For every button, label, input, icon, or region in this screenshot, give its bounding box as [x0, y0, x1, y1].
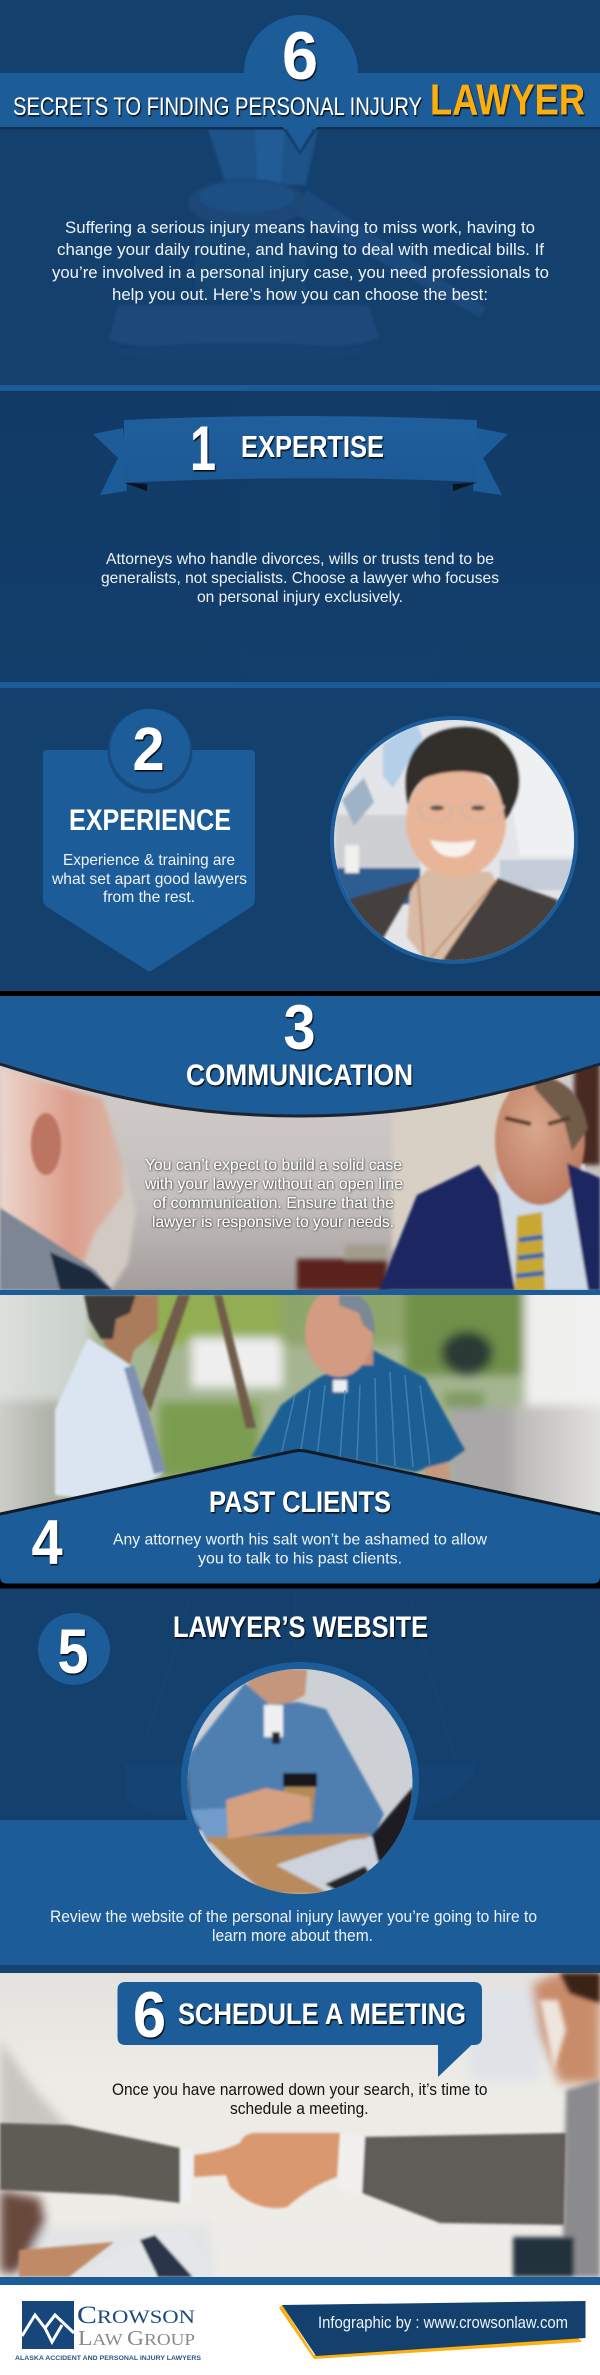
bubble number: 6 — [133, 1978, 166, 2051]
title banner — [0, 15, 600, 155]
text: expertise body: Attorneys who handle divorces, wills or trusts tend to be — [106, 551, 494, 568]
shirt stripes — [281, 1372, 430, 1467]
speech bubble heading — [118, 1978, 482, 2077]
body text: Review the website of the personal injury lawyer you’re going to hire to — [50, 1908, 537, 1926]
intro paragraph: you’re involved in a personal injury case, you need professionals to — [52, 263, 549, 282]
text: expertise body: generalists, not specialists. Choose a lawyer who focuses — [101, 570, 499, 587]
bubble heading: SCHEDULE A MEETING — [178, 1998, 466, 2031]
body text — [112, 2081, 488, 2118]
panel: section 3 communication — [0, 991, 600, 1290]
overlay body text: with your lawyer without an open line — [144, 1176, 403, 1193]
angled blue panel — [0, 1450, 600, 1584]
overlay body text: lawyer is responsive to your needs. — [152, 1214, 394, 1231]
title text: SECRETS TO FINDING PERSONAL INJURY — [13, 93, 422, 121]
intro paragraph — [52, 218, 549, 304]
icon: faint gavel behind intro text — [109, 129, 486, 361]
body text: Once you have narrowed down your search, it’s time to — [112, 2081, 488, 2099]
credit banner — [279, 2301, 586, 2359]
body text: learn more about them. — [212, 1927, 373, 1945]
photo: lawyer talking to client — [0, 1060, 600, 1290]
section heading: PAST CLIENTS — [209, 1486, 391, 1519]
ribbon: expertise heading — [93, 414, 508, 495]
title number: 6 — [282, 18, 318, 94]
intro paragraph: Suffering a serious injury means having to miss work, having to — [65, 218, 535, 237]
logo name: CROWSON — [77, 2302, 195, 2329]
panel: section 5 lawyer's website — [0, 1588, 600, 1973]
text: expertise body — [101, 551, 499, 606]
divider strip — [0, 1290, 600, 1295]
section number: 3 — [284, 993, 316, 1063]
experience body — [51, 852, 247, 906]
credit text: Infographic by : www.crowsonlaw.com — [318, 2313, 568, 2332]
experience body: Experience & training are — [63, 852, 235, 869]
body text — [50, 1908, 537, 1945]
badge number: 5 — [58, 1617, 88, 1687]
body text — [113, 1532, 487, 1568]
text: expertise body: on personal injury exclusively. — [197, 589, 403, 606]
panel: section 1 expertise background — [0, 385, 600, 688]
photo: two men talking outdoors — [0, 1285, 600, 1525]
photo: man with coffee and laptop — [181, 1662, 419, 1900]
body text: Any attorney worth his salt won’t be ashamed to allow — [113, 1532, 487, 1548]
body text: schedule a meeting. — [230, 2100, 368, 2118]
intro paragraph: help you out. Here’s how you can choose the best: — [112, 285, 488, 304]
faint scales of justice backdrop — [125, 1592, 475, 1813]
banner band — [0, 73, 600, 127]
number badge — [38, 1613, 110, 1685]
section number: 4 — [32, 1508, 62, 1578]
footer — [0, 2285, 600, 2375]
logo: Crowson Law Group — [15, 2301, 202, 2362]
overlay body text: You can’t expect to build a solid case — [145, 1157, 402, 1174]
overlay body text — [144, 1157, 403, 1231]
section heading: LAWYER’S WEBSITE — [173, 1611, 428, 1644]
ribbon heading: EXPERTISE — [241, 429, 384, 464]
experience heading: EXPERIENCE — [69, 804, 231, 837]
experience body: from the rest. — [103, 889, 195, 906]
panel: intro background — [0, 0, 600, 385]
shield: experience card — [43, 708, 255, 972]
number badge — [108, 708, 192, 794]
experience body: what set apart good lawyers — [51, 871, 247, 888]
panel: section 4 past clients — [0, 1285, 600, 1589]
badge number: 2 — [132, 715, 164, 783]
panel: section 6 schedule a meeting — [0, 1973, 600, 2285]
logo subtitle: LAW GROUP — [78, 2326, 195, 2350]
logo tagline: ALASKA ACCIDENT AND PERSONAL INJURY LAWYERS — [15, 2355, 202, 2362]
section heading: COMMUNICATION — [186, 1059, 413, 1092]
panel: section 2 experience background — [0, 688, 600, 991]
ribbon main band — [123, 416, 477, 483]
ribbon tails — [93, 428, 127, 495]
intro paragraph: change your daily routine, and having to deal with medical bills. If — [57, 240, 544, 259]
icon: location pin holding the number — [244, 15, 358, 155]
curved header with dark edge — [0, 996, 600, 1116]
ribbon number: 1 — [190, 414, 216, 484]
body text: you to talk to his past clients. — [198, 1550, 402, 1568]
photo: smiling woman in circle — [330, 716, 580, 970]
photo: business handshake — [0, 1973, 600, 2277]
logo mark — [22, 2301, 74, 2349]
overlay body text: of communication. Ensure that the — [153, 1195, 394, 1212]
